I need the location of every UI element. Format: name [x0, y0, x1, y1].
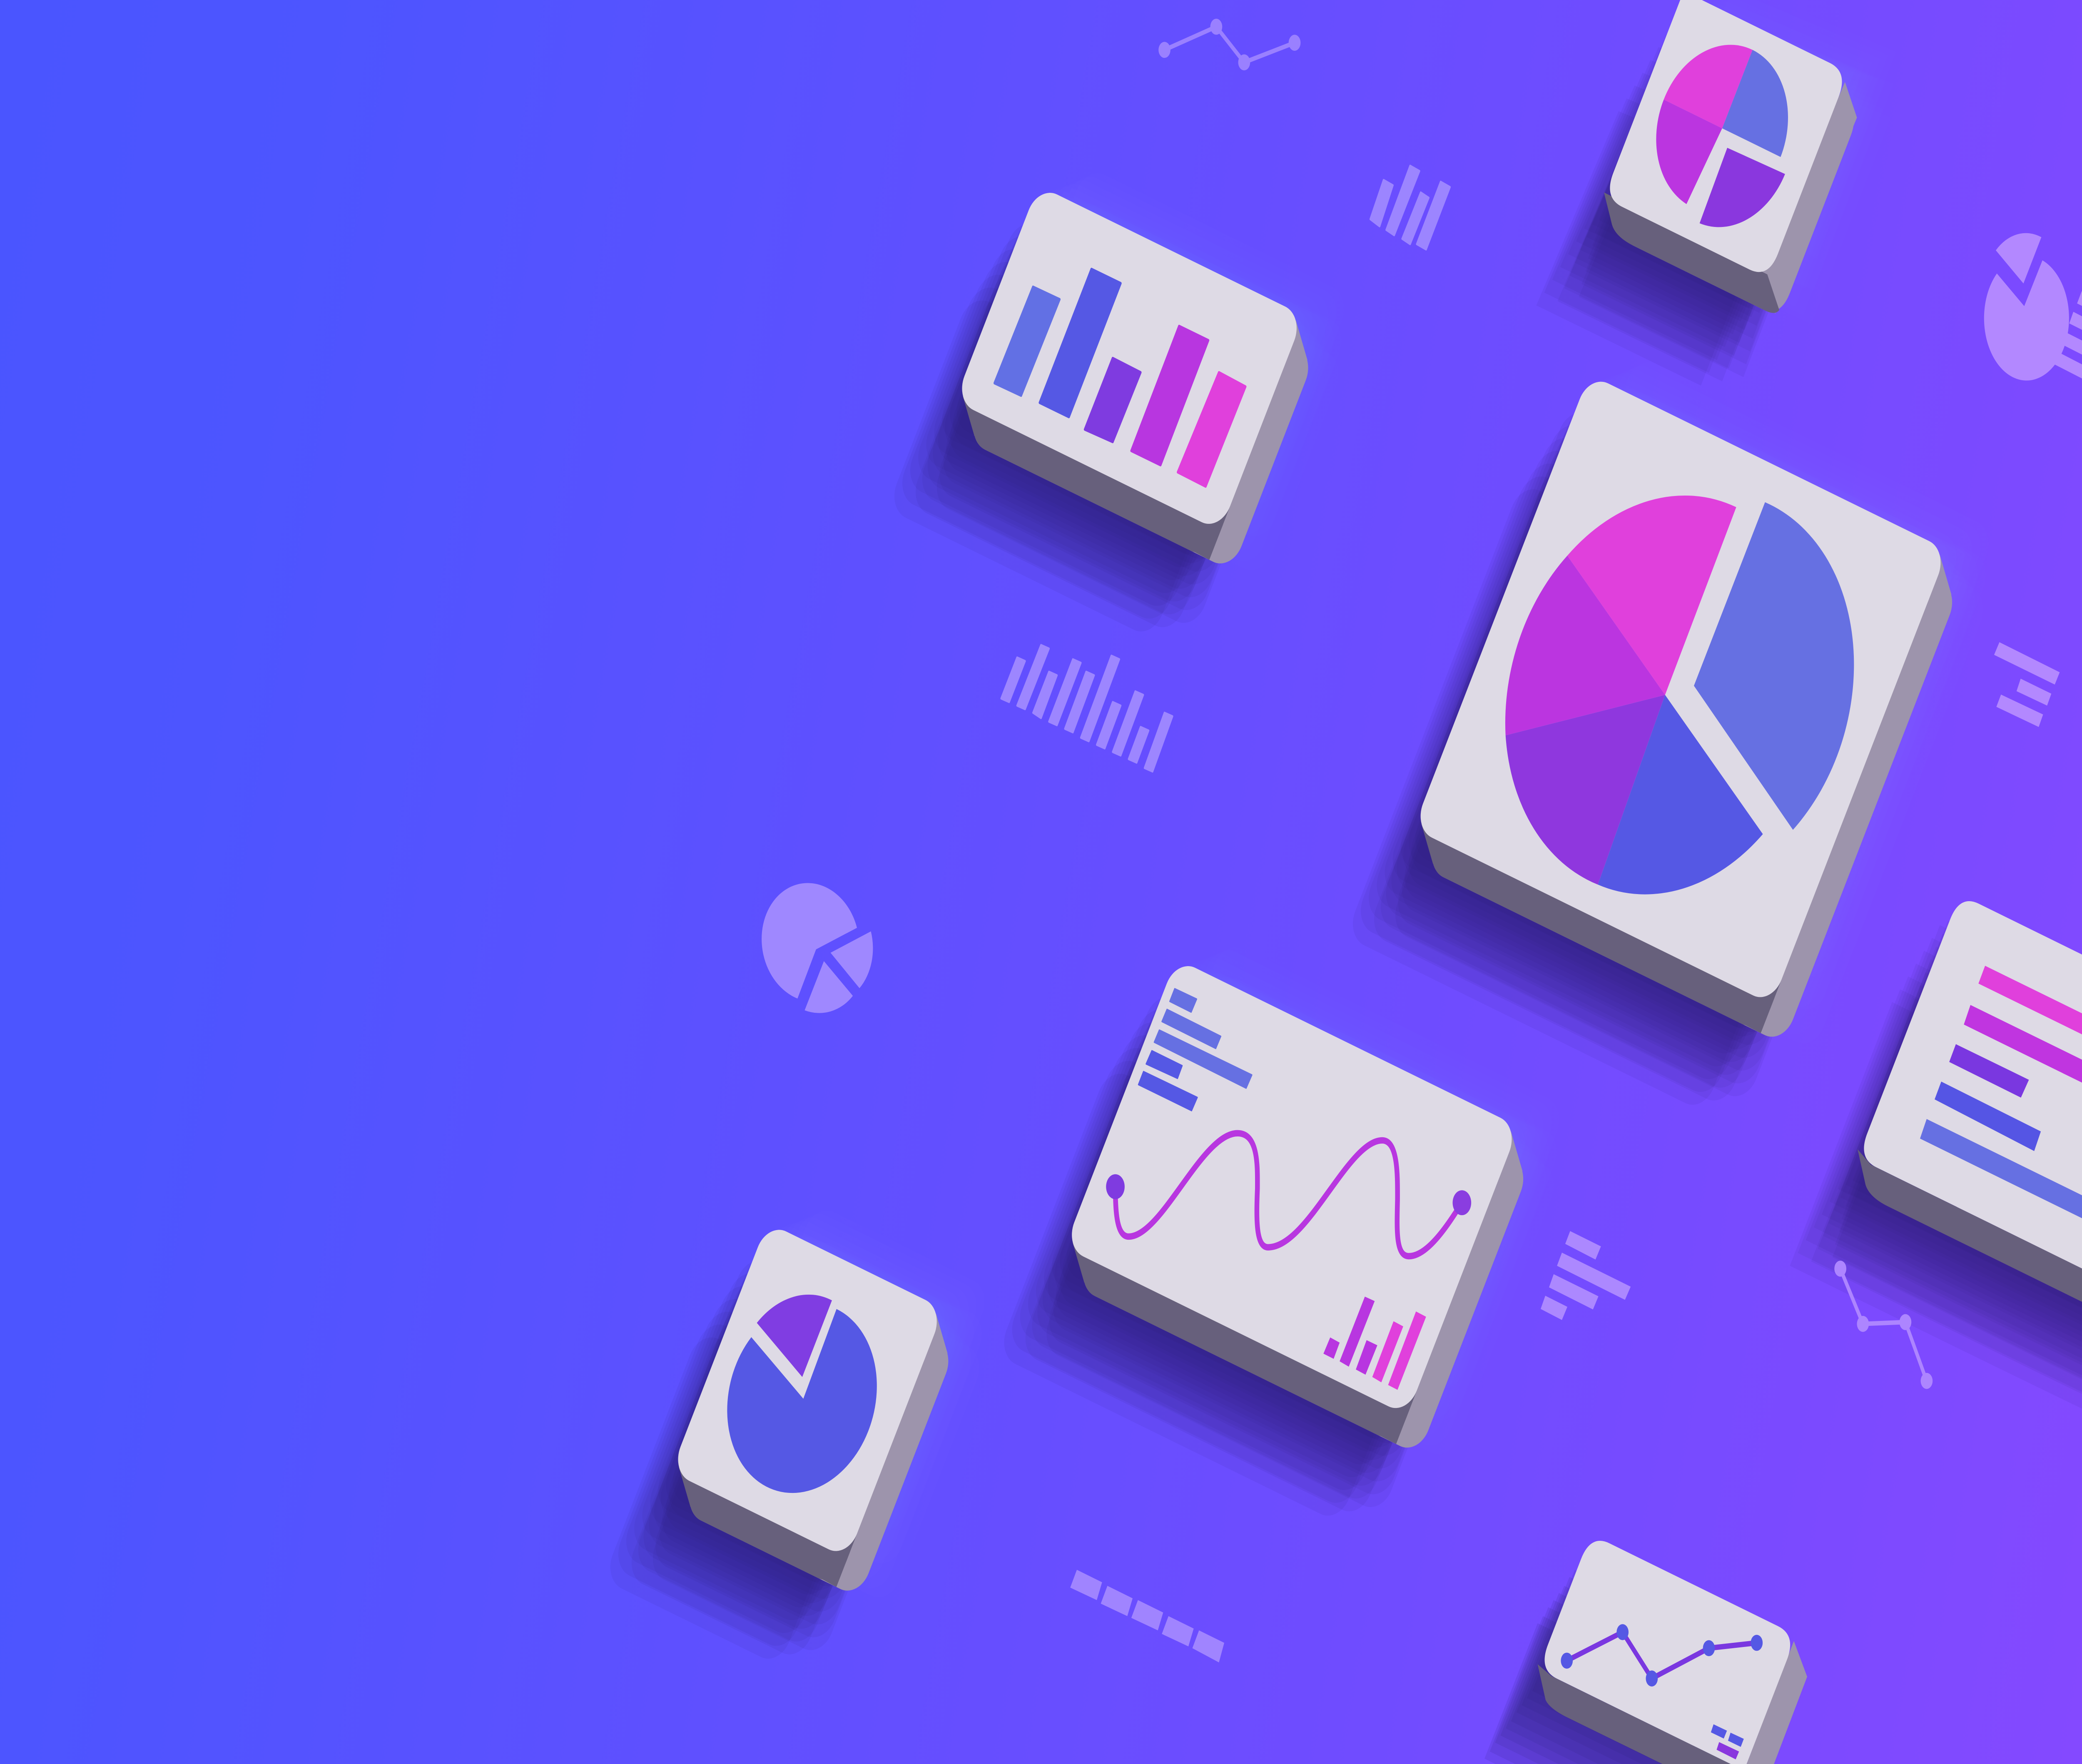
line chart: [1561, 1624, 1763, 1687]
panel: bar chart card: [944, 185, 1327, 571]
icon: faint line chart right: [1834, 1261, 1933, 1389]
icon: faint pie chart top right: [1984, 233, 2069, 381]
panel: small pie card top right: [1604, 0, 1857, 314]
line chart: [1106, 1133, 1471, 1256]
pie chart: [701, 1271, 905, 1520]
list bars: [1138, 989, 1252, 1111]
icon: faint list bars right: [1994, 642, 2060, 727]
icon: faint bar histogram: [1001, 645, 1173, 772]
panel: pie card lower left: [660, 1222, 966, 1598]
mini legend bars: [1711, 1724, 1744, 1759]
bars: [994, 269, 1245, 486]
panel: large pie card: [1402, 374, 1970, 1044]
panel: wave line card: [1053, 959, 1542, 1455]
panel: line chart card bottom: [1538, 1541, 1807, 1764]
mini bars: [1323, 1297, 1426, 1390]
icon: faint dashes bottom: [1070, 1570, 1224, 1662]
icon: faint list bars lower: [1541, 1231, 1631, 1320]
panel: list card right edge: [1858, 901, 2082, 1302]
icon: faint pie chart centre: [762, 883, 873, 1013]
list bars: [1920, 966, 2082, 1218]
pie chart: [1629, 21, 1820, 251]
icon: faint bars top: [1370, 166, 1450, 249]
pie chart: [1452, 423, 1908, 963]
icon: faint list bars right edge: [2054, 291, 2082, 379]
icon: faint line chart top: [1158, 19, 1300, 70]
